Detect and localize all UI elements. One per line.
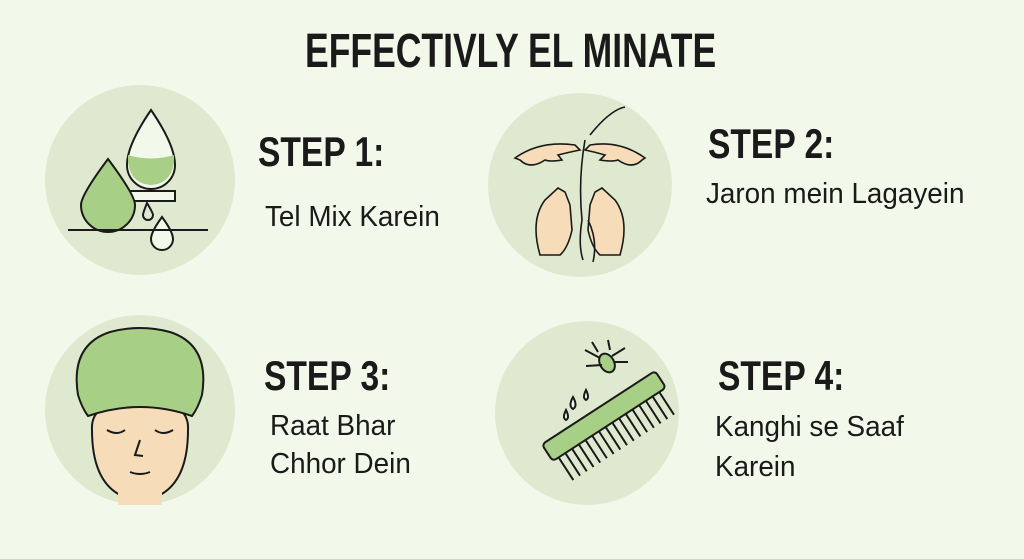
icon: hands bbox=[488, 93, 672, 277]
step 4 text bbox=[715, 411, 904, 483]
icon: comb and louse bbox=[495, 321, 681, 505]
step 2 text: Jaron mein Lagayein bbox=[706, 178, 964, 210]
step 4 heading: STEP 4: bbox=[718, 352, 844, 399]
step 2 heading: STEP 2: bbox=[708, 120, 834, 167]
step 1 heading: STEP 1: bbox=[258, 128, 384, 175]
step 3 heading: STEP 3: bbox=[264, 352, 390, 399]
icon: shower cap face bbox=[45, 315, 235, 505]
icon: oil drops bbox=[45, 85, 235, 275]
step 3 text bbox=[270, 410, 411, 480]
step 3 text: Chhor Dein bbox=[270, 448, 411, 480]
title: EFFECTIVLY EL MINATE bbox=[305, 25, 716, 78]
step 3 text: Raat Bhar bbox=[270, 410, 395, 442]
step 4 text: Kanghi se Saaf bbox=[715, 411, 904, 443]
step 4 text: Karein bbox=[715, 451, 795, 483]
step 1 text: Tel Mix Karein bbox=[265, 201, 440, 233]
